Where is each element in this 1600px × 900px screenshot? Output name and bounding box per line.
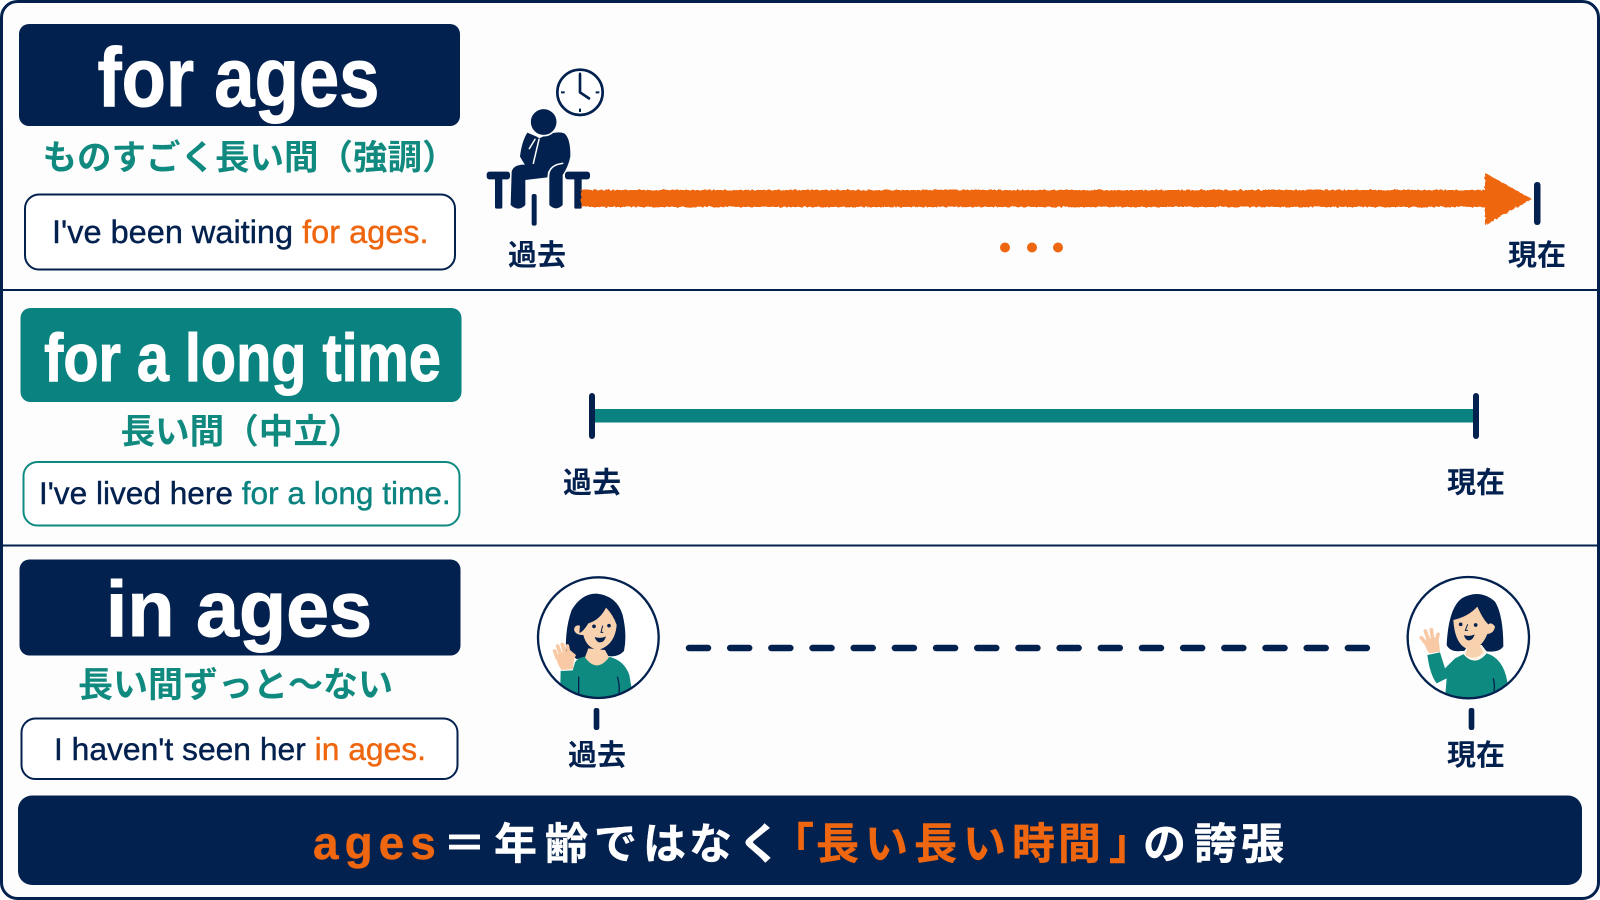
arrow: long orange arrow <box>581 173 1532 225</box>
example sentence: for a long time: I've lived here for a long time. <box>39 475 451 511</box>
timeline: teal bar with ticks <box>589 393 1479 439</box>
icon: clock <box>557 70 603 115</box>
banner: key takeaway <box>18 796 1582 885</box>
dashed line <box>689 645 1369 651</box>
icon: waving hand <box>1421 630 1440 653</box>
banner: key takeaway: ＝ <box>443 821 486 869</box>
subtitle: in ages meaning: 長い間ずっと〜ない <box>78 666 393 705</box>
example sentence: for a long time <box>24 462 460 526</box>
portrait: woman in the past <box>538 577 659 730</box>
panel: in ages <box>20 560 1529 779</box>
icon: bench <box>487 172 590 209</box>
heading: in ages: in ages <box>106 564 372 653</box>
label: now: 現在 <box>1447 739 1505 772</box>
heading: in ages <box>20 560 460 656</box>
tick: now <box>1469 708 1474 730</box>
example sentence: in ages: I haven't seen her in ages. <box>54 731 426 767</box>
heading: for a long time: for a long time <box>44 321 441 396</box>
subtitle: for a long time meaning: 長い間（中立） <box>120 414 363 452</box>
panel: for ages <box>19 24 1566 272</box>
label: past: 過去 <box>563 466 621 500</box>
label: past: 過去 <box>508 239 566 272</box>
label: past: 過去 <box>568 739 626 772</box>
heading: for ages: for ages <box>98 30 379 124</box>
label: now: 現在 <box>1508 239 1566 272</box>
subtitle: for ages meaning: ものすごく長い間（強調） <box>42 140 456 178</box>
banner: key takeaway: の誇張 <box>1143 821 1284 869</box>
example sentence: in ages <box>22 718 458 779</box>
example sentence: for ages: I've been waiting for ages. <box>52 214 429 250</box>
portrait: woman now <box>1408 577 1529 730</box>
banner: key takeaway: ages <box>313 817 442 869</box>
icon: waiting person on bench with clock <box>487 70 603 226</box>
tick: past <box>594 708 599 730</box>
icon: seated person <box>511 108 570 209</box>
heading: for ages <box>19 24 460 126</box>
label: now: 現在 <box>1447 466 1505 500</box>
icon: waving hand <box>555 644 576 670</box>
dots: ellipsis <box>1000 242 1063 252</box>
banner: key takeaway: 年齢ではなく <box>494 821 781 869</box>
example sentence: for ages <box>25 194 455 270</box>
tick: now <box>1534 182 1540 225</box>
tick: past <box>532 194 537 226</box>
panel: for a long time <box>20 308 1505 526</box>
banner: key takeaway: 「長い長い時間」 <box>771 821 1152 869</box>
